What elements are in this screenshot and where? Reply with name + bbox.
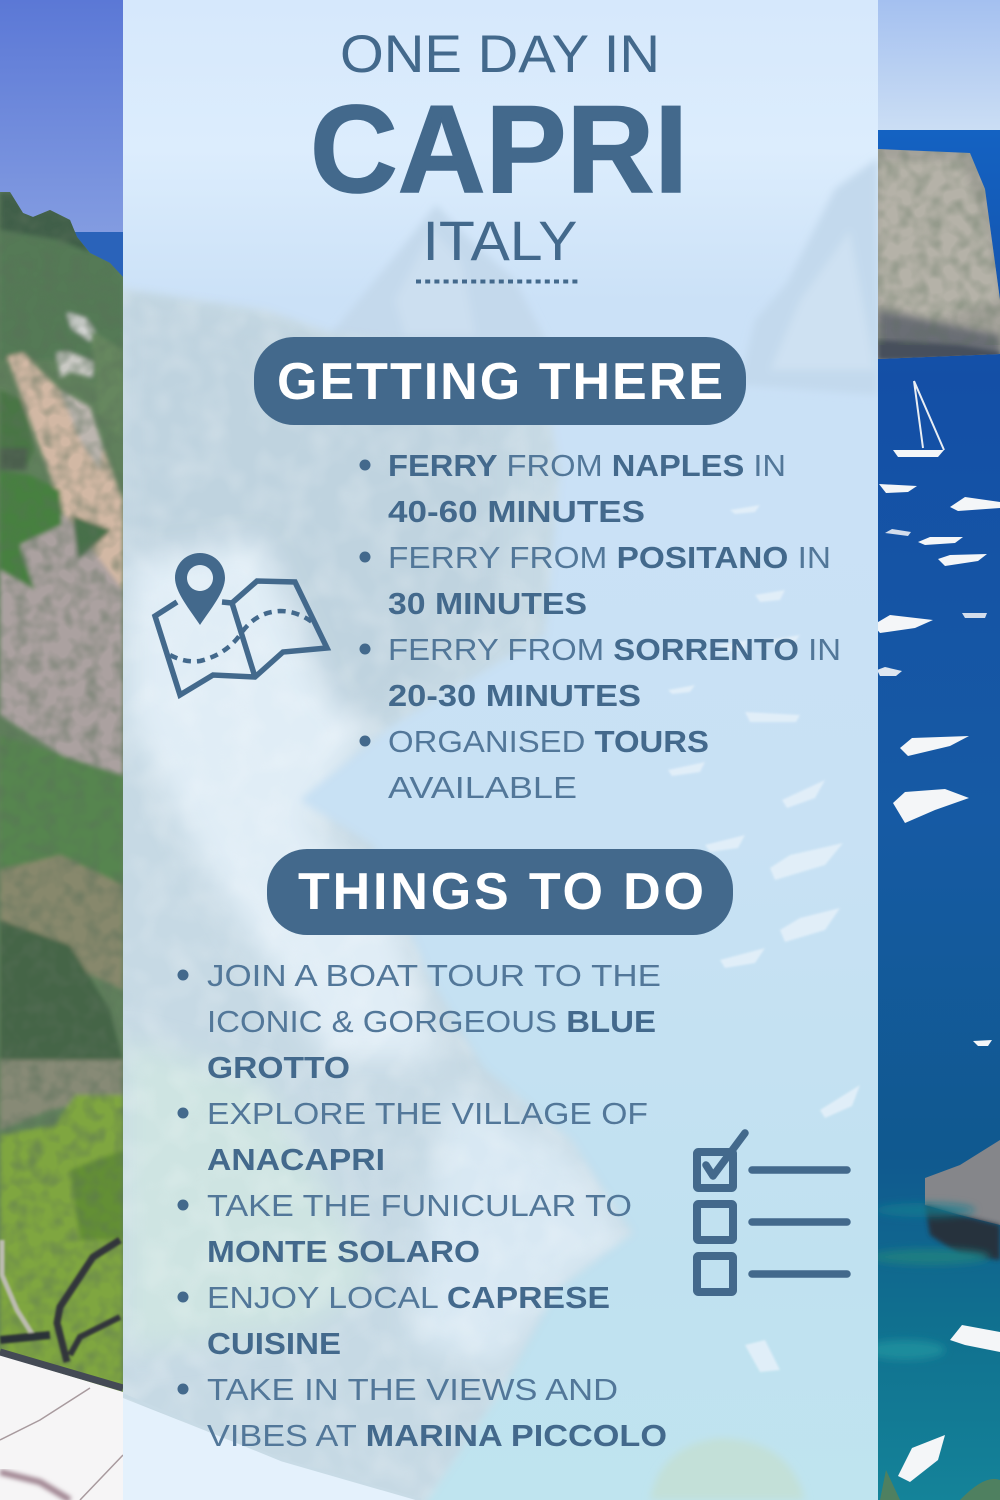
item: ferry from Sorrento: FERRY FROM SORRENTO IN xyxy=(388,632,841,667)
coastal rock xyxy=(925,1140,1000,1260)
section heading: getting there: GETTING THERE xyxy=(277,353,723,411)
title: Capri: CAPRI xyxy=(310,81,688,219)
item: Anacapri xyxy=(207,1096,648,1177)
item: ferry from Naples: 40-60 MINUTES xyxy=(388,494,645,529)
item: funicular xyxy=(207,1188,632,1269)
faded hillside xyxy=(123,288,630,1500)
bullet points xyxy=(178,970,188,1394)
left photo strip: hillside xyxy=(0,0,123,1500)
faded rock stacks xyxy=(330,158,878,395)
item: organised tours xyxy=(388,724,709,805)
section heading: getting there xyxy=(254,337,746,425)
faraglioni rock stack xyxy=(878,145,1000,360)
dotted divider under title xyxy=(416,280,580,284)
item: Anacapri: ANACAPRI xyxy=(207,1142,385,1177)
item: organised tours: AVAILABLE xyxy=(388,770,577,805)
item: boat tour: ICONIC & GORGEOUS BLUE xyxy=(207,1004,656,1039)
item: ferry from Positano: FERRY FROM POSITANO IN xyxy=(388,540,831,575)
item: cuisine: ENJOY LOCAL CAPRESE xyxy=(207,1280,610,1315)
item: boat tour: GROTTO xyxy=(207,1050,350,1085)
item: ferry from Positano xyxy=(388,540,831,621)
item: boat tour: JOIN A BOAT TOUR TO THE xyxy=(207,958,661,993)
item: ferry from Positano: 30 MINUTES xyxy=(388,586,587,621)
item: funicular: TAKE THE FUNICULAR TO xyxy=(207,1188,632,1223)
title block xyxy=(310,25,688,272)
faded boats xyxy=(668,505,860,1372)
item: cuisine: CUISINE xyxy=(207,1326,341,1361)
list: getting there xyxy=(360,448,841,805)
bullet points xyxy=(360,460,370,746)
teal shallows xyxy=(865,1203,990,1360)
icon: checklist xyxy=(697,1133,847,1292)
section heading: things to do xyxy=(267,849,733,935)
icon: map with location pin xyxy=(155,553,327,695)
item: ferry from Naples: FERRY FROM NAPLES IN xyxy=(388,448,786,483)
section heading: things to do: THINGS TO DO xyxy=(298,863,704,921)
list: things to do xyxy=(178,958,667,1453)
title: one day in: ONE DAY IN xyxy=(340,25,660,84)
item: Marina Piccolo xyxy=(207,1372,667,1453)
item: ferry from Sorrento: 20-30 MINUTES xyxy=(388,678,641,713)
right photo strip: sea, rock stack and boats xyxy=(865,0,1000,1500)
faded tree xyxy=(650,1438,805,1500)
translucent content panel with faded photo xyxy=(100,0,878,1500)
boats xyxy=(873,381,1000,1482)
item: boat tour xyxy=(207,958,661,1085)
item: Marina Piccolo: TAKE IN THE VIEWS AND xyxy=(207,1372,618,1407)
item: Anacapri: EXPLORE THE VILLAGE OF xyxy=(207,1096,648,1131)
item: organised tours: ORGANISED TOURS xyxy=(388,724,709,759)
item: ferry from Naples xyxy=(388,448,786,529)
item: cuisine xyxy=(207,1280,610,1361)
item: Marina Piccolo: VIBES AT MARINA PICCOLO xyxy=(207,1418,667,1453)
title: Italy: ITALY xyxy=(422,209,578,272)
faded terrace xyxy=(123,1398,421,1500)
shoreline foliage at bottom xyxy=(880,1470,1000,1500)
item: ferry from Sorrento xyxy=(388,632,841,713)
item: funicular: MONTE SOLARO xyxy=(207,1234,480,1269)
